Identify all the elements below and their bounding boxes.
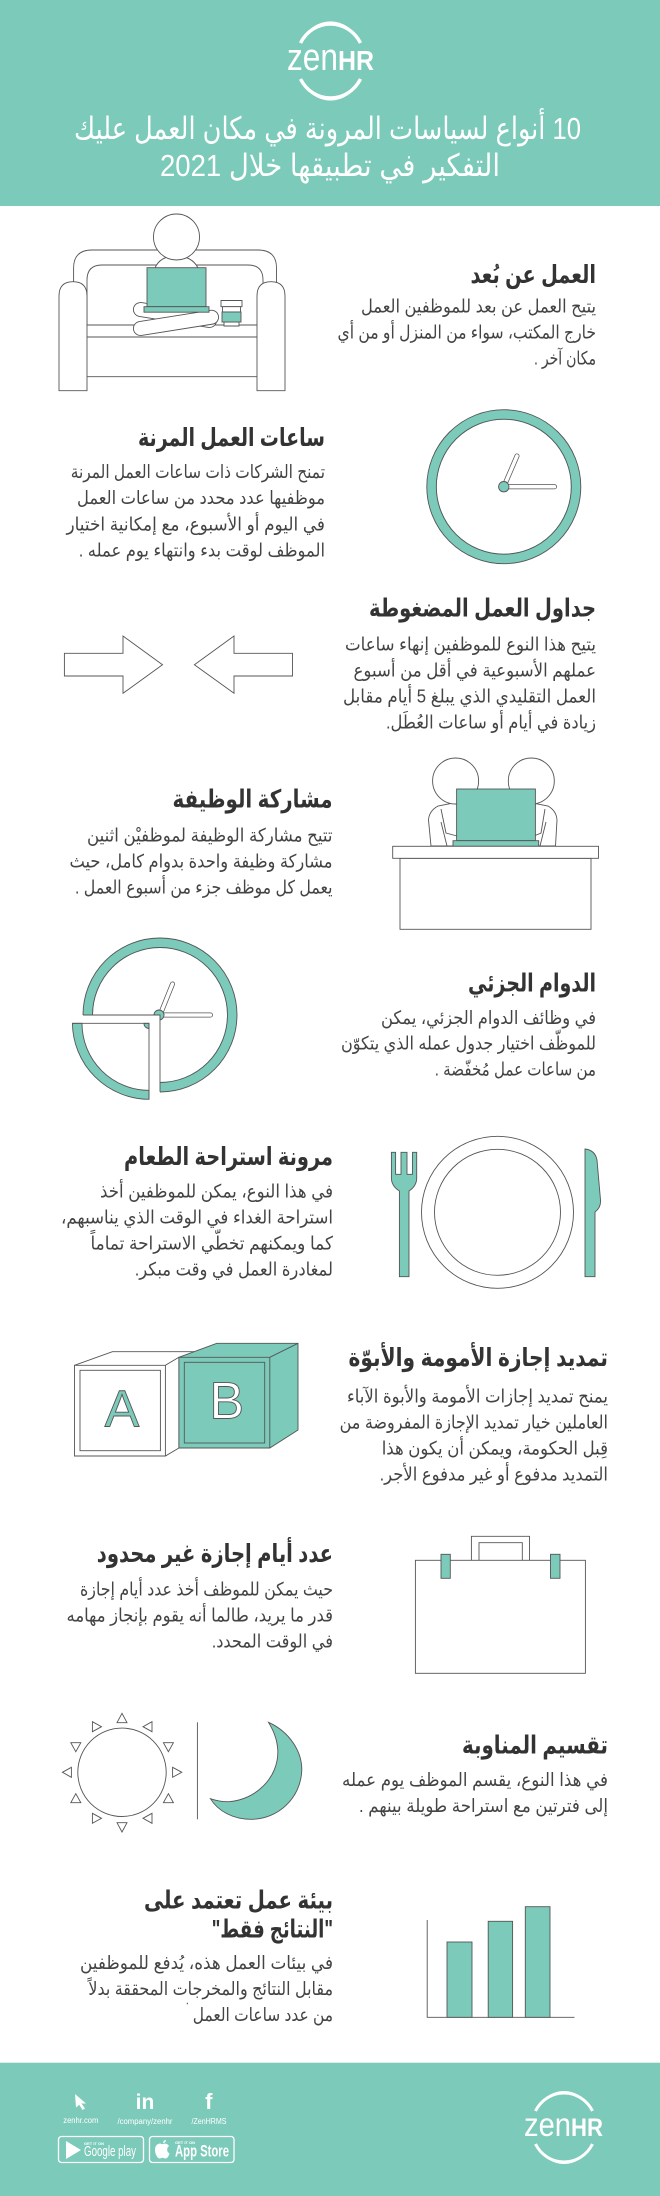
logo: zen <box>524 2106 571 2143</box>
logo <box>287 22 374 100</box>
panel: job sharing <box>70 758 598 929</box>
icon: fork, plate and knife <box>391 1136 601 1288</box>
text block: لمغادرة العمل في وقت مبكر. <box>135 1258 333 1280</box>
icon: briefcase <box>415 1536 585 1673</box>
icon: split clock <box>68 938 237 1106</box>
button: app store: App Store <box>175 2142 229 2160</box>
text block: قِبل الحكومة، ويمكن أن يكون هذا <box>382 1436 608 1460</box>
icon: bar chart <box>427 1907 574 2017</box>
text block: مكان آخر . <box>534 347 596 370</box>
text block: استراحة الغداء في الوقت الذي يناسبهم، <box>61 1206 333 1228</box>
text block: حيث يمكن للموظف أخذ عدد أيام إجازة <box>80 1577 333 1601</box>
panel: results only work environment <box>80 1886 574 2026</box>
facebook link: /ZenHRMS <box>192 2117 226 2126</box>
text block: التمديد مدفوع أو غير مدفوع الأجر. <box>380 1462 608 1486</box>
text block: في الوقت المحدد. <box>212 1631 333 1653</box>
heading: "النتائج فقط" <box>212 1915 333 1944</box>
heading <box>144 1886 333 1944</box>
text block: مقابل النتائج والمخرجات المحققة بدلاً <box>86 1976 333 2000</box>
button: app store: GET IT ON <box>175 2140 195 2145</box>
logo: HR <box>338 45 374 76</box>
text block: للموظّف اختيار جدول عمله الذي يتكوّن <box>341 1030 596 1055</box>
panel: part time <box>68 938 596 1106</box>
text block <box>61 1178 333 1280</box>
text block: زيادة في أيام أو ساعات العُطَل. <box>386 709 596 733</box>
icon: website cursor <box>75 2094 86 2110</box>
text block <box>338 296 596 370</box>
heading: الدوام الجزئي <box>468 970 596 999</box>
text block: يتيح هذا النوع للموظفين إنهاء ساعات <box>345 634 596 656</box>
text block: يعمل كل موظف جزء من أسبوع العمل . <box>75 874 332 898</box>
text block: من ساعات عمل مُخفّضة . <box>435 1059 596 1081</box>
text block: قدر ما يريد، طالما أنه يقوم بإنجاز مهامه <box>66 1603 333 1627</box>
panel: remote work <box>59 214 596 391</box>
panel: unlimited leave <box>66 1536 585 1673</box>
text block: العمل التقليدي الذي يبلغ 5 أيام مقابل <box>343 683 596 707</box>
text block: تمنح الشركات ذات ساعات العمل المرنة <box>71 461 325 483</box>
icon: two people sharing a laptop <box>393 758 598 929</box>
text block: في هذا النوع، يقسم الموظف يوم عمله <box>342 1769 608 1791</box>
button: google play: GET IT ON <box>84 2141 104 2146</box>
text block: مشاركة وظيفة واحدة بدوام كامل، حيث <box>70 850 332 872</box>
panel: flexible hours <box>66 410 581 564</box>
panel: compressed schedules <box>64 595 596 733</box>
text block: يتيح العمل عن بعد للموظفين العمل <box>361 296 596 318</box>
heading: العمل عن بُعد <box>470 261 596 290</box>
heading: ساعات العمل المرنة <box>138 424 325 453</box>
text block <box>342 1769 608 1817</box>
text block <box>341 1007 596 1081</box>
text block: خارج المكتب، سواء من المنزل أو من أي <box>338 320 596 344</box>
panel: flexible lunch break <box>61 1136 601 1288</box>
text block: العاملين خيار تمديد الإجازة المفروضة من <box>340 1412 608 1434</box>
text block: من عدد ساعات العمل <box>193 2004 333 2026</box>
text block: في وظائف الدوام الجزئي، يمكن <box>381 1007 596 1029</box>
title: التفكير في تطبيقها خلال 2021 <box>160 148 500 184</box>
icon: sun and moon <box>62 1713 302 1832</box>
text block: تتيح مشاركة الوظيفة لموظفيْن اثنين <box>87 825 332 847</box>
text block: في هذا النوع، يمكن للموظفين أخذ <box>100 1178 333 1202</box>
icon: linkedin: in <box>136 2091 154 2114</box>
icon: alphabet blocks: A <box>105 1381 140 1439</box>
title <box>74 108 581 184</box>
text block <box>343 634 596 733</box>
button: google play: Google play <box>84 2143 136 2160</box>
heading: مشاركة الوظيفة <box>172 785 332 814</box>
text block: يمنح تمديد إجازات الأمومة والأبوة الآباء <box>347 1385 608 1408</box>
button: app store <box>150 2136 234 2162</box>
linkedin link: /company/zenhr <box>118 2117 173 2126</box>
text block <box>70 825 332 898</box>
title: 10 أنواع لسياسات المرونة في مكان العمل عليك <box>74 108 581 147</box>
panel: parental leave <box>74 1342 608 1486</box>
icon: alphabet blocks: B <box>209 1372 244 1430</box>
text block: كما ويمكنهم تخطّي الاستراحة تماماً <box>90 1229 333 1254</box>
text block <box>66 461 325 561</box>
icon: alphabet blocks <box>74 1343 298 1456</box>
text block: الموظف لوقت بدء وانتهاء يوم عمله . <box>79 539 325 561</box>
heading: جداول العمل المضغوطة <box>369 595 596 624</box>
heading: مرونة استراحة الطعام <box>124 1143 333 1172</box>
heading: عدد أيام إجازة غير محدود <box>97 1537 333 1569</box>
text block: موظفيها عدد محدد من ساعات العمل <box>77 487 325 509</box>
text block: في بيئات العمل هذه، يُدفع للموظفين <box>80 1952 333 1974</box>
text block: عملهم الأسبوعية في أقل من أسبوع <box>354 657 596 681</box>
icon: person on sofa with laptop <box>59 214 285 391</box>
heading: تقسيم المناوبة <box>462 1731 608 1760</box>
icon: clock <box>427 410 581 564</box>
text block: إلى فترتين مع استراحة طويلة بينهم . <box>359 1795 608 1817</box>
text block <box>66 1577 333 1653</box>
header band <box>0 0 660 206</box>
text block: في اليوم أو الأسبوع، مع إمكانية اختيار <box>66 511 325 535</box>
text block <box>80 1952 333 2026</box>
panel: split shift <box>62 1713 608 1832</box>
logo: HR <box>571 2114 603 2142</box>
footer band <box>0 2063 660 2196</box>
text block <box>340 1385 608 1486</box>
logo <box>524 2091 603 2164</box>
website link: zenhr.com <box>63 2116 99 2125</box>
heading: بيئة عمل تعتمد على <box>144 1886 333 1914</box>
icon: facebook: f <box>205 2089 213 2114</box>
button: google play <box>58 2136 144 2162</box>
logo: zen <box>287 37 338 79</box>
icon: converging arrows <box>64 636 293 693</box>
